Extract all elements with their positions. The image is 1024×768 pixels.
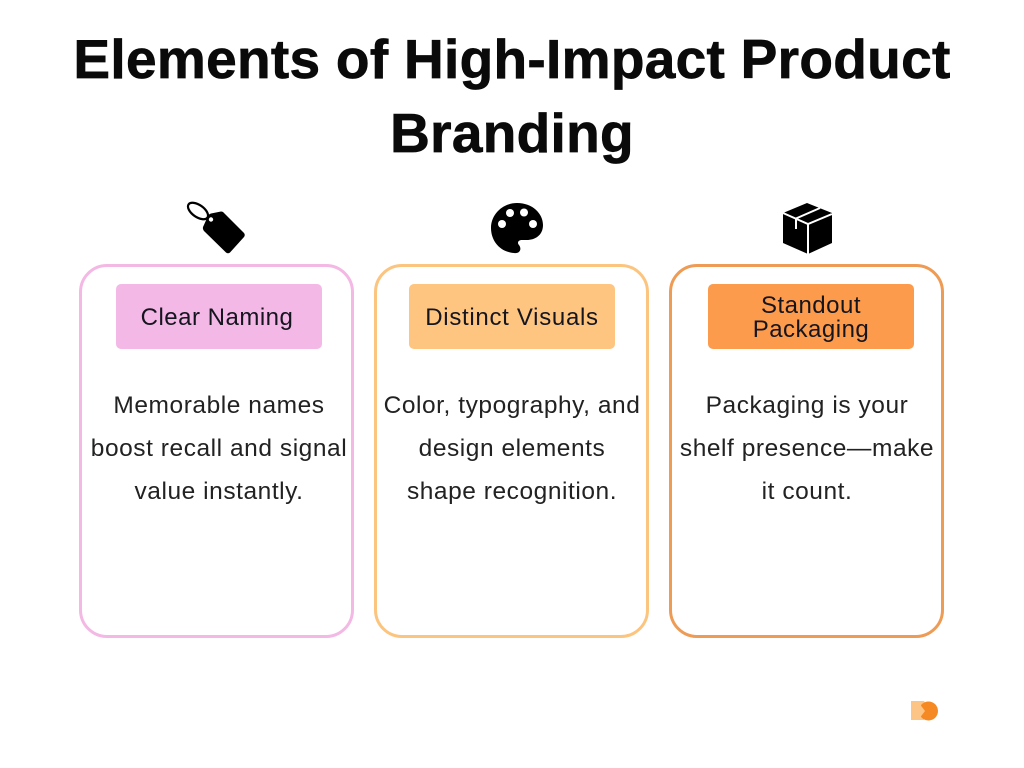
- text: standout packaging: Packaging is your: [706, 392, 908, 419]
- panel: standout packaging: [669, 264, 944, 638]
- panel: clear naming: [79, 264, 354, 638]
- text: distinct visuals: [384, 392, 640, 505]
- text: distinct visuals: design elements: [419, 435, 605, 462]
- heading: standout packaging: [708, 284, 914, 349]
- heading: clear naming: [116, 284, 322, 349]
- title: Elements of High-Impact Product: [73, 28, 951, 90]
- text: standout packaging: [680, 392, 934, 505]
- heading: standout packaging: Standout: [761, 292, 861, 318]
- text: distinct visuals: Color, typography, and: [384, 392, 640, 419]
- text: clear naming: Memorable names: [113, 392, 325, 419]
- text: standout packaging: shelf presence—make: [680, 435, 934, 462]
- text: clear naming: value instantly.: [134, 478, 304, 505]
- text: clear naming: boost recall and signal: [91, 435, 347, 462]
- text: clear naming: [91, 392, 347, 505]
- heading: distinct visuals: Distinct Visuals: [425, 304, 599, 331]
- heading: clear naming: Clear Naming: [141, 304, 293, 331]
- title: Branding: [390, 102, 634, 164]
- heading: distinct visuals: [409, 284, 615, 349]
- panel: distinct visuals: [374, 264, 649, 638]
- heading: standout packaging: Packaging: [753, 316, 869, 343]
- text: standout packaging: it count.: [762, 478, 852, 505]
- title: [73, 28, 951, 164]
- text: distinct visuals: shape recognition.: [407, 478, 617, 505]
